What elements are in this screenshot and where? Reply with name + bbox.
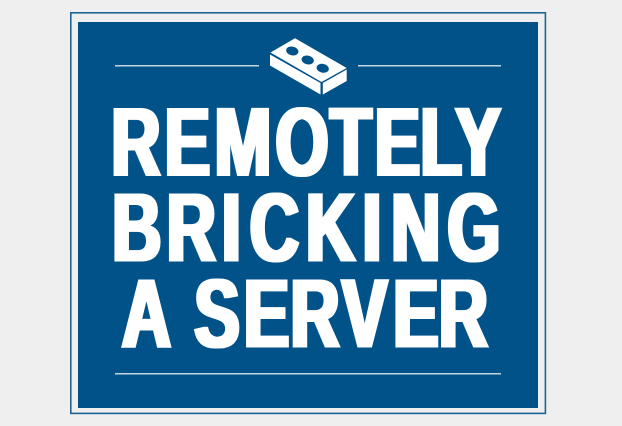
panel: blue background [78,22,538,408]
rule: top right [358,65,501,66]
title line 3: A SERVER [122,259,488,368]
icon: brick [270,38,347,94]
rule: bottom [115,373,501,374]
rule: top left [115,65,259,66]
outer frame [71,13,545,413]
title [111,87,501,368]
title line 1: REMOTELY [111,87,501,196]
title line 2: BRICKING [112,173,500,282]
